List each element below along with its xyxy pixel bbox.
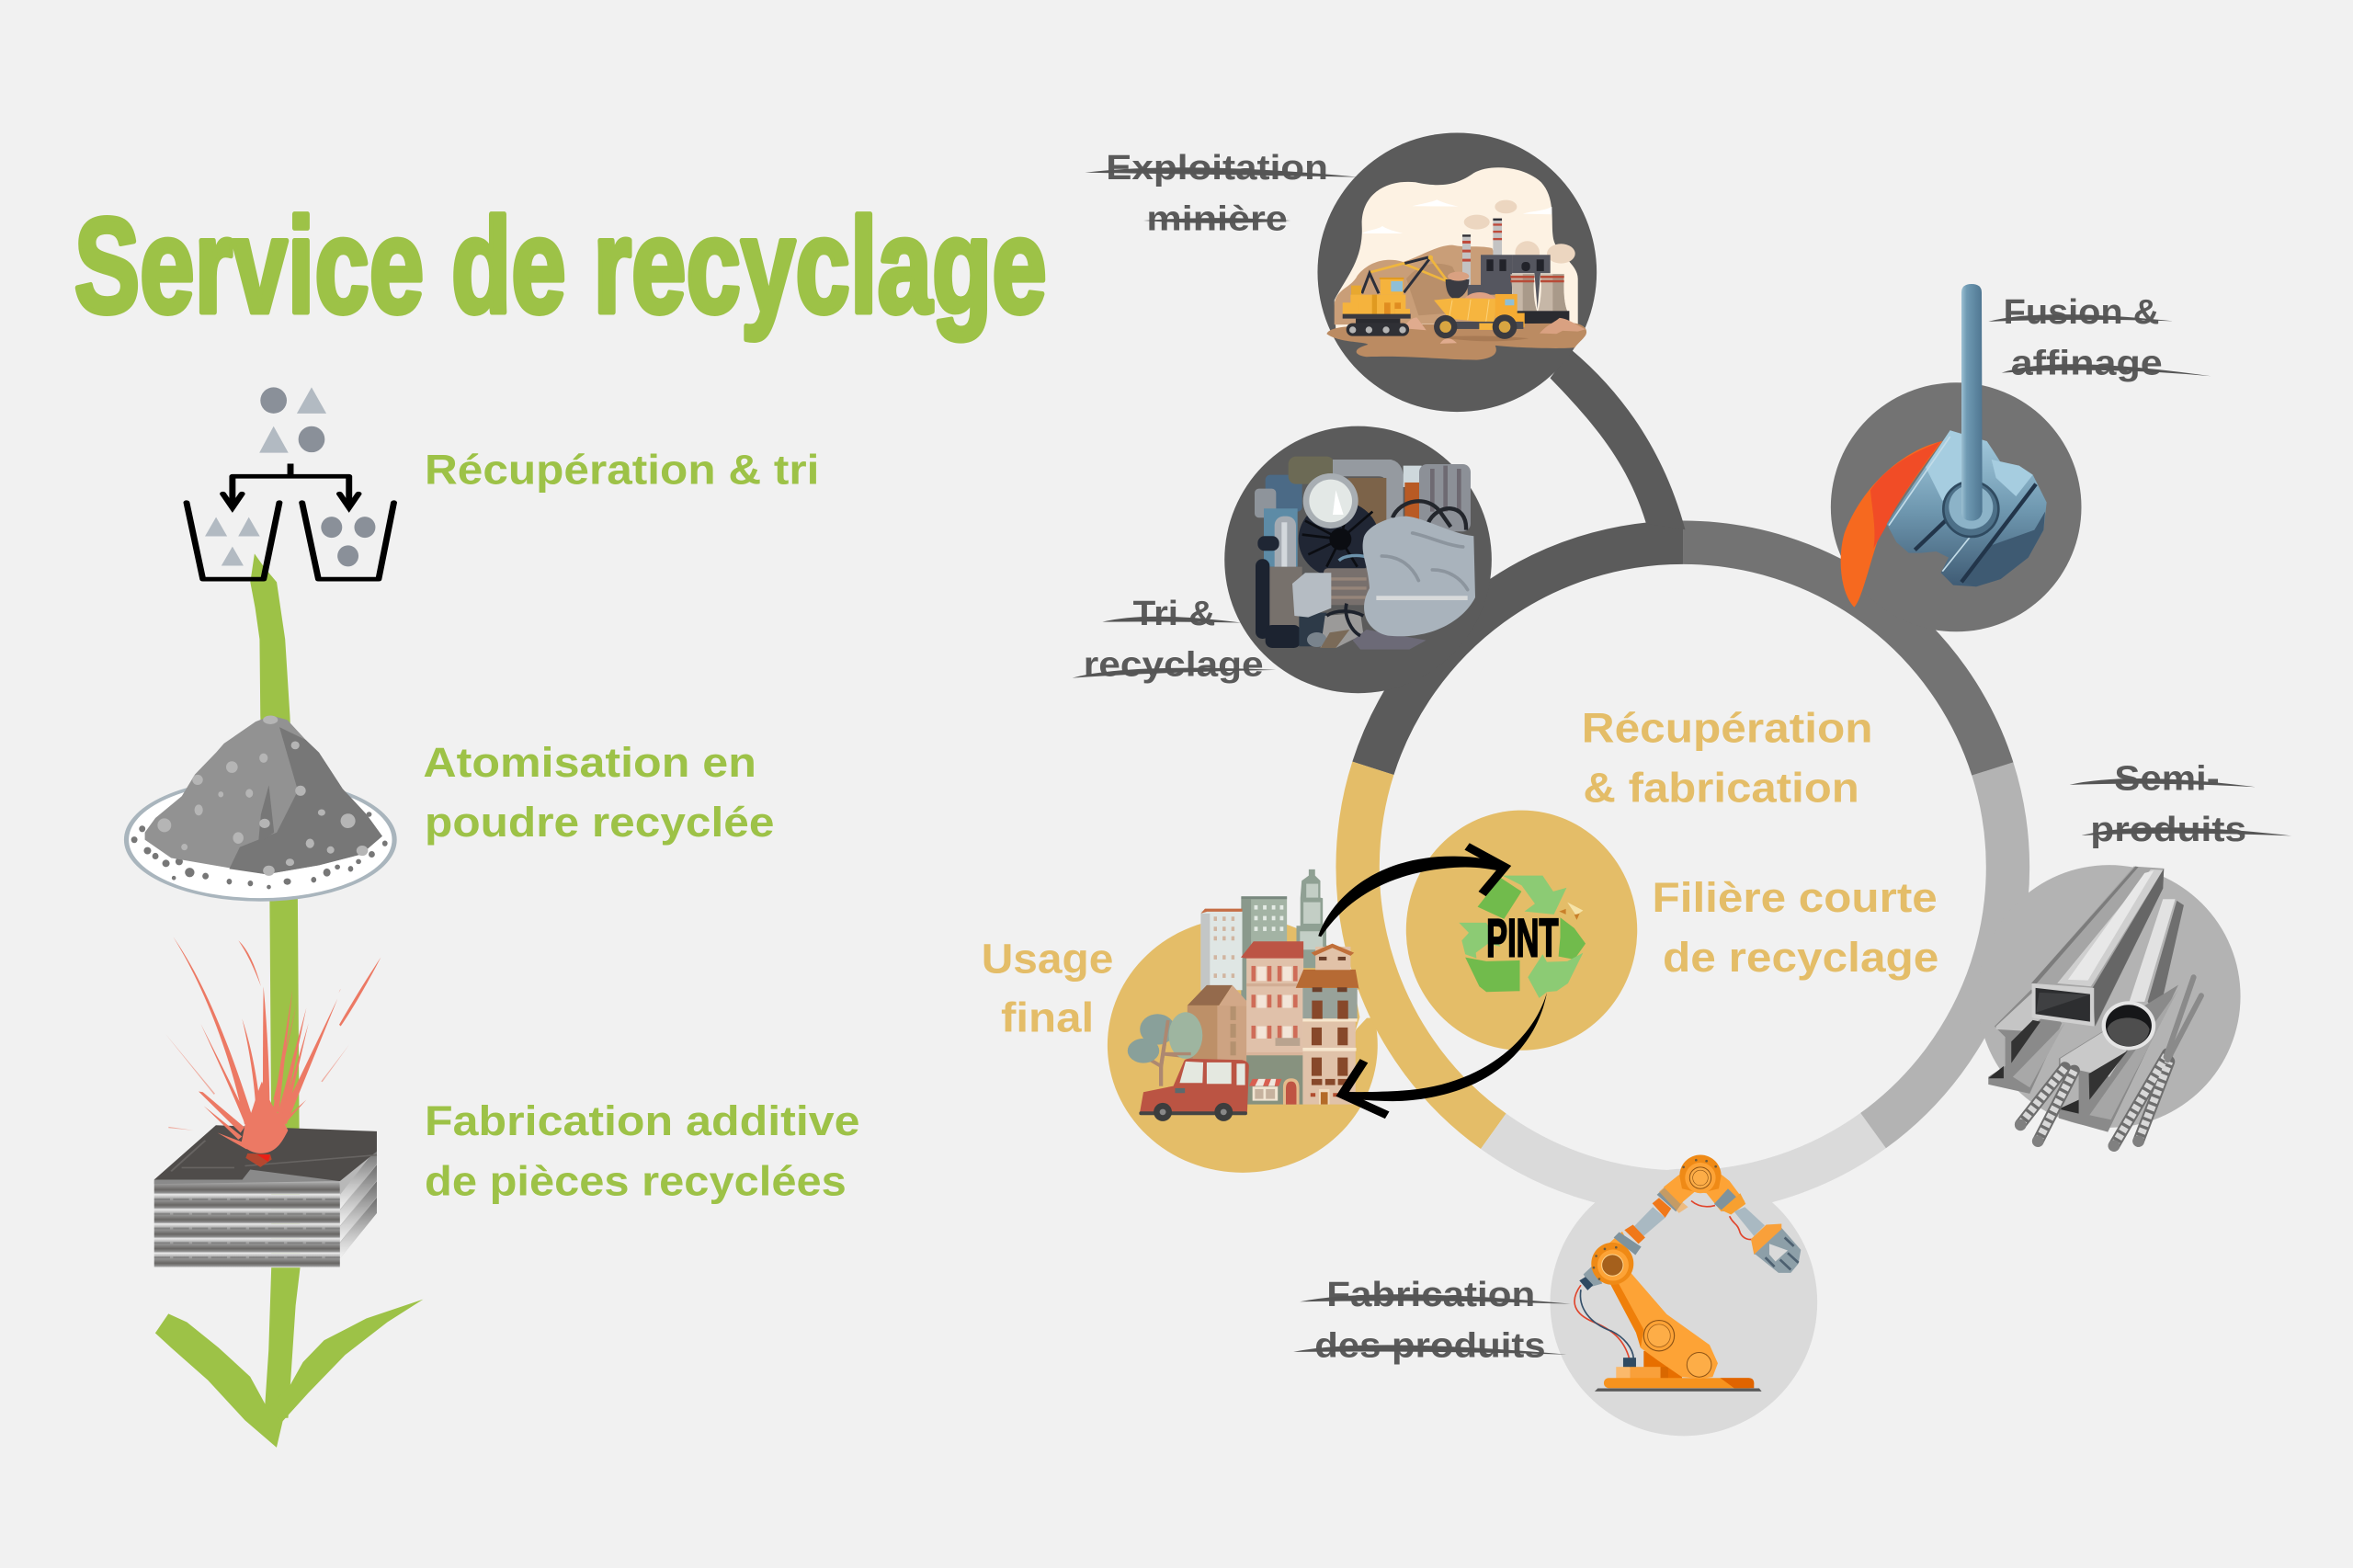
panel: tri et recyclage — [1224, 426, 1492, 693]
label: usage final: final — [1001, 994, 1094, 1040]
illustration: mine and factory — [1326, 167, 1586, 360]
label: semi-produits: produits — [2090, 810, 2246, 849]
label: exploitation miniere: minière — [1146, 199, 1288, 239]
label: filiere courte: de recyclage — [1663, 934, 1938, 981]
panel: PINT recycling hub — [1406, 811, 1637, 1051]
label: recuperation et fabrication — [1582, 704, 1873, 812]
label: exploitation miniere: Exploitation — [1106, 148, 1328, 187]
connector: mining to ring — [1551, 349, 1685, 529]
panel: semi-produits — [1978, 865, 2241, 1152]
ring: circular economy — [1358, 542, 2007, 1192]
label: atomisation: Atomisation en — [423, 739, 756, 786]
panel: usage final circle — [1108, 917, 1395, 1173]
label: atomisation — [423, 739, 774, 846]
label: tri et recyclage: recyclage — [1084, 644, 1264, 684]
label: fabrication des produits: des produits — [1314, 1326, 1546, 1366]
arrow: PINT to usage — [1342, 993, 1547, 1115]
label: filiere courte: Filière courte — [1653, 874, 1938, 921]
title: Service de recyclage — [74, 191, 1047, 342]
label: fabrication des produits — [1293, 1275, 1571, 1366]
icon: additive manufacturing block — [154, 937, 381, 1267]
label: usage final — [982, 936, 1113, 1040]
illustration: city and van — [1128, 869, 1359, 1121]
label: recuperation: Récupération & tri — [425, 446, 819, 493]
sparks — [165, 937, 381, 1167]
label: filiere courte — [1653, 874, 1938, 981]
panel: fusion et affinage — [1831, 284, 2081, 631]
illustration: steel profiles — [1988, 867, 2201, 1152]
label: recuperation et fabrication: Récupération — [1582, 704, 1873, 751]
icon: powder pile — [126, 715, 394, 900]
label: semi-produits — [2069, 759, 2291, 849]
panel: mining — [1317, 132, 1597, 412]
label: fabrication des produits: Fabrication — [1326, 1275, 1535, 1314]
illustration: scrap pile — [1255, 457, 1475, 650]
label: recuperation et fabrication: & fabrication — [1583, 765, 1859, 812]
label: usage final: Usage — [982, 936, 1113, 983]
label: fabrication additive: de pièces recyclées — [425, 1157, 847, 1204]
label: tri et recyclage: Tri & — [1133, 594, 1215, 633]
panel: PINT recycling hub: PINT — [1486, 909, 1559, 969]
label: exploitation miniere — [1085, 148, 1358, 239]
label: fabrication additive — [425, 1097, 860, 1204]
panel: fabrication des produits — [1551, 1155, 1817, 1436]
label: fabrication additive: Fabrication additive — [425, 1097, 860, 1144]
label: tri et recyclage — [1073, 594, 1276, 684]
icon: sorting — [187, 387, 394, 579]
label: fusion et affinage: Fusion & — [2004, 292, 2159, 332]
label: fusion et affinage — [1988, 292, 2211, 382]
label: atomisation: poudre recyclée — [425, 799, 774, 846]
illustration: robot arm — [1574, 1155, 1801, 1392]
label: semi-produits: Semi- — [2114, 759, 2220, 799]
label: fusion et affinage: affinage — [2011, 343, 2163, 382]
logo: PINT recycle — [1459, 876, 1586, 998]
illustration: ladle — [1841, 284, 2047, 608]
arrow: usage to PINT — [1318, 846, 1507, 937]
panel: green process arrow — [155, 553, 423, 1448]
